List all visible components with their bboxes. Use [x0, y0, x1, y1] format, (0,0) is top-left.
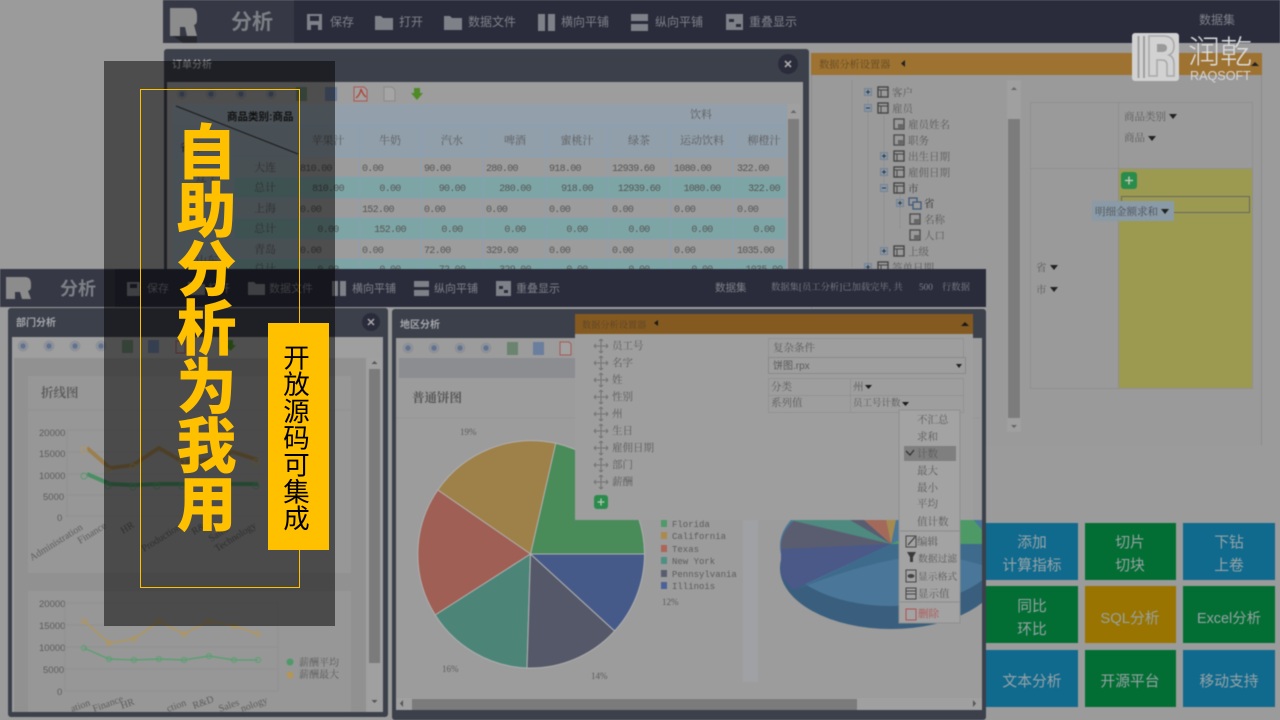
icon: add green plus — [1121, 172, 1137, 189]
y axis labels: 5000 — [43, 492, 64, 503]
window: region analysis — [392, 309, 1002, 720]
field tree: 雇员姓名 — [908, 118, 950, 131]
field tree: 省 — [924, 197, 935, 210]
order pivot table: 810.00 — [300, 164, 333, 175]
field list: 员工号 — [612, 340, 644, 352]
order pivot table: 总计 — [254, 180, 276, 194]
line chart card — [28, 376, 351, 573]
button: open source platform — [1085, 650, 1176, 707]
field list: 姓 — [612, 373, 623, 386]
y axis labels: 20000 — [39, 428, 65, 439]
order pivot table: 918.00 — [549, 164, 582, 175]
order pivot table: 牛奶 — [379, 133, 401, 147]
x axis labels: Sales — [207, 524, 231, 545]
yellow title frame — [140, 90, 300, 588]
window title: 订单分析 — [172, 58, 212, 71]
pie percentage labels: 14% — [591, 671, 608, 681]
x axis labels: Technology — [213, 520, 259, 555]
order pivot table: 0.00 — [362, 246, 384, 257]
line chart card: 折线图 — [41, 385, 79, 400]
field tree: 签单日期 — [892, 261, 934, 274]
order pivot table: 上海 — [254, 201, 276, 215]
field tree — [852, 80, 950, 274]
field list — [594, 339, 654, 489]
x axis labels: Sales — [217, 697, 241, 715]
y axis labels: 15000 — [39, 621, 65, 632]
button: year on year — [986, 586, 1078, 643]
watermark logo — [1132, 33, 1252, 83]
order pivot table: 绿茶 — [628, 133, 650, 147]
dark title overlay panel — [104, 61, 335, 626]
order pivot table: 0.00 — [691, 225, 713, 236]
button: Excel analysis — [1183, 586, 1275, 643]
order pivot table: 商品类别:商品 — [227, 110, 294, 123]
order pivot table: 918.00 — [561, 184, 594, 195]
field list: 部门 — [612, 458, 633, 471]
order pivot table: 1080.00 — [683, 184, 721, 195]
toolbar icons and labels: 数据文件 — [269, 281, 313, 295]
settings header — [811, 53, 1262, 75]
horizontal scrollbar — [396, 698, 982, 710]
aggregation dropdown menu: 编辑 — [917, 535, 938, 548]
vertical scrollbar — [368, 358, 382, 712]
pie legend: Illinois — [672, 582, 715, 592]
report toolbar icons — [176, 87, 423, 101]
order pivot table: 0.00 — [691, 265, 713, 276]
toolbar icons and labels — [127, 281, 970, 296]
toolbar icons and labels: 数据集[员工分析]已加载完毕, 共 — [771, 281, 903, 293]
panel: data analysis settings (region) — [575, 314, 973, 623]
button: mobile support — [1183, 650, 1275, 707]
watermark logo: RAQSOFT — [1190, 69, 1251, 83]
report toolbar icons — [18, 340, 236, 353]
main title: 自助分析为我用 — [168, 121, 235, 532]
order pivot table: 省 市 — [180, 141, 204, 154]
order pivot table: 啤酒 — [504, 134, 526, 147]
chart options form: 饼图.rpx — [773, 359, 810, 372]
order pivot table: 0.00 — [549, 205, 571, 216]
3D salary average line — [87, 474, 258, 485]
button: SQL analysis — [1085, 586, 1176, 643]
pie percentage labels — [442, 427, 679, 681]
order pivot table: 329.00 — [499, 265, 532, 276]
x axis labels: R&D — [190, 517, 214, 538]
order pivot table: 1035.00 — [737, 246, 775, 257]
field list: 雇佣日期 — [612, 441, 654, 454]
x axis labels: HR — [119, 697, 136, 712]
order pivot table: 0.00 — [362, 164, 384, 175]
chart options form: 分类 — [771, 380, 792, 393]
toolbar heading: 分析 — [60, 279, 96, 299]
pie percentage labels: 19% — [460, 427, 477, 437]
order pivot table: 12939.60 — [618, 184, 661, 195]
pie percentage labels: 16% — [442, 664, 459, 674]
measure chip — [1092, 201, 1174, 221]
feature button grid — [986, 523, 1275, 707]
field tree: 雇佣日期 — [908, 166, 950, 179]
button: year on year: 同比 — [1017, 598, 1047, 615]
legend: 薪酬最大 — [299, 668, 339, 681]
field tree: 出生日期 — [908, 150, 950, 163]
toolbar icons and labels: 纵向平铺 — [655, 14, 703, 29]
field tree: 名称 — [924, 214, 945, 226]
toolbar icons and labels: 横向平铺 — [352, 281, 396, 295]
aggregation dropdown menu: 求和 — [917, 430, 938, 443]
toolbar icons and labels: 横向平铺 — [561, 14, 609, 29]
order pivot table: 0.00 — [549, 246, 571, 257]
pie legend: Pennsylvania — [672, 570, 737, 580]
x axis labels: Finance — [91, 693, 125, 715]
order pivot table: 总计 — [254, 261, 276, 275]
field list: 性别 — [612, 390, 633, 403]
y axis labels: 10000 — [39, 643, 65, 654]
order pivot table: 12939.60 — [612, 164, 655, 175]
icon: raqsoft logo — [1132, 33, 1179, 81]
x axis labels — [69, 693, 269, 715]
aggregation dropdown menu: 最小 — [917, 481, 938, 494]
pivot layout grid: 省 — [1036, 261, 1047, 274]
order pivot table: 322.00 — [737, 164, 770, 175]
order pivot table: 辽宁 — [196, 171, 218, 184]
legend — [286, 656, 339, 681]
button: drill down and roll up — [1183, 523, 1275, 580]
order pivot table: 柳橙汁 — [748, 133, 780, 147]
button: drill down and roll up: 下钻 — [1214, 534, 1244, 551]
button: text analysis: 文本分析 — [1002, 673, 1062, 690]
order pivot table — [172, 104, 786, 276]
order pivot table: 运动饮料 — [680, 133, 724, 147]
line chart card 2 — [28, 591, 351, 715]
field tree: 人口 — [924, 229, 945, 242]
aggregation dropdown menu: 值计数 — [917, 515, 949, 528]
toolbar icons and labels: 数据文件 — [468, 14, 516, 29]
button: drill down and roll up: 上卷 — [1214, 557, 1244, 574]
order pivot table: 0.00 — [674, 205, 696, 216]
toolbar icons and labels: 500 — [919, 283, 933, 293]
y axis labels — [39, 599, 65, 698]
button: SQL analysis: SQL分析 — [1100, 610, 1160, 627]
aggregation dropdown menu: 不汇总 — [917, 413, 949, 426]
field tree: 客户 — [892, 86, 913, 99]
order pivot table: 0.00 — [566, 265, 588, 276]
icon: product logo R — [6, 277, 31, 299]
button: slice and dice: 切块 — [1115, 557, 1145, 574]
toolbar icons and labels: 打开 — [208, 281, 230, 295]
order pivot table: 0.00 — [317, 265, 339, 276]
field tree: 雇员 — [892, 102, 914, 115]
order pivot table: 0.00 — [566, 225, 588, 236]
order pivot table: 0.00 — [300, 205, 322, 216]
field tree: 市 — [908, 182, 919, 195]
settings header — [575, 314, 973, 334]
aggregation dropdown menu: 最大 — [917, 464, 938, 477]
second application toolbar — [0, 269, 986, 307]
tree scrollbar — [1007, 80, 1021, 432]
aggregation dropdown menu: 平均 — [917, 497, 938, 510]
toolbar icons and labels: 重叠显示 — [749, 15, 797, 29]
order pivot table: 0.00 — [424, 205, 446, 216]
order pivot table: 72.00 — [439, 265, 466, 276]
order pivot table: 0.00 — [379, 184, 401, 195]
measure chip: 明细金额求和 — [1095, 205, 1158, 218]
y axis labels — [39, 428, 65, 524]
window: order analysis — [164, 49, 809, 276]
y axis labels: 20000 — [39, 599, 65, 610]
pie legend: California — [672, 532, 727, 542]
field list: 州 — [612, 408, 622, 420]
close button — [778, 54, 798, 74]
report toolbar icons — [402, 342, 571, 355]
3D pie chart — [780, 520, 982, 630]
settings header: 数据分析设置器 — [819, 58, 890, 71]
icon: product logo R — [170, 8, 197, 43]
aggregation dropdown menu — [899, 410, 960, 623]
subtitle tag: 开放源码可集成 — [279, 344, 309, 531]
watermark logo: 润乾 — [1188, 34, 1252, 70]
top application toolbar — [163, 0, 1280, 43]
x axis labels — [28, 517, 259, 564]
toolbar icons and labels: 重叠显示 — [516, 281, 560, 295]
order pivot table: 329.00 — [486, 246, 519, 257]
order pivot table: 152.00 — [362, 205, 395, 216]
pie legend: Florida — [672, 520, 710, 530]
button: Excel analysis: Excel分析 — [1197, 610, 1261, 627]
order pivot table: 总计 — [254, 221, 276, 235]
salary max line — [84, 621, 258, 643]
order pivot table: 0.00 — [753, 225, 775, 236]
button: slice and dice: 切片 — [1115, 534, 1145, 551]
order pivot table: 280.00 — [486, 164, 519, 175]
order pivot table: 山东 — [196, 254, 218, 267]
y axis labels: 0 — [57, 687, 62, 698]
aggregation dropdown menu: 显示格式 — [918, 570, 957, 583]
order pivot table: 0.00 — [737, 205, 759, 216]
pie legend: New York — [672, 557, 715, 567]
pie chart — [418, 441, 644, 668]
button: add calculated metric: 计算指标 — [1002, 557, 1062, 574]
order pivot table: 90.00 — [439, 184, 466, 195]
pivot layout grid: 商品类别 — [1124, 110, 1166, 123]
aggregation dropdown menu: 计数 — [917, 447, 938, 460]
order pivot table: 0.00 — [504, 225, 526, 236]
order pivot table: 0.00 — [674, 246, 696, 257]
3D salary max line — [87, 448, 258, 468]
x axis labels: nology — [239, 695, 269, 715]
order pivot table: 810.00 — [312, 184, 345, 195]
y axis labels: 15000 — [39, 449, 65, 460]
chart options form: 复杂条件 — [773, 341, 815, 354]
y axis labels: 5000 — [43, 665, 64, 676]
x axis labels: R&D — [191, 694, 215, 712]
order pivot table: 0.00 — [612, 246, 634, 257]
pie legend — [661, 520, 737, 592]
order pivot table: 0.00 — [612, 205, 634, 216]
aggregation dropdown menu: 删除 — [918, 607, 939, 620]
button: text analysis — [986, 650, 1078, 707]
order pivot table: 72.00 — [424, 246, 451, 257]
x axis labels: ation — [69, 698, 92, 715]
x axis labels: ction — [165, 698, 188, 715]
chart title: 普通饼图 — [412, 390, 462, 405]
window title: 部门分析 — [16, 316, 56, 329]
chart options form — [768, 338, 966, 412]
order pivot table: 汽水 — [441, 133, 463, 147]
settings header: 数据分析设置器 — [582, 319, 646, 330]
aggregation dropdown menu: 数据过滤 — [918, 552, 957, 565]
icon: add green plus — [594, 495, 608, 509]
panel: data analysis settings (order) — [811, 53, 1262, 445]
y axis labels: 0 — [57, 513, 62, 524]
order pivot table: 0.00 — [486, 205, 508, 216]
order pivot table: 0.00 — [628, 225, 650, 236]
pivot layout grid — [1030, 102, 1252, 388]
pivot layout grid: 市 — [1036, 283, 1047, 296]
toolbar icons and labels: 数据集 — [715, 281, 747, 294]
button: year on year: 环比 — [1017, 621, 1047, 638]
field list: 薪酬 — [612, 475, 633, 488]
subtitle tag — [268, 323, 329, 550]
field list: 名字 — [612, 357, 633, 369]
chart options form: 系列值 — [771, 396, 803, 409]
y axis labels: 10000 — [39, 471, 65, 482]
window: department analysis — [8, 308, 388, 717]
x axis labels: Finance — [76, 520, 109, 547]
order pivot table: 1035.00 — [745, 265, 783, 276]
button: slice and dice — [1085, 523, 1176, 580]
field tree: 职务 — [908, 134, 929, 147]
toolbar heading: 分析 — [231, 11, 273, 34]
order pivot table: 饮料 — [690, 107, 712, 121]
order pivot table: 0.00 — [441, 225, 463, 236]
order pivot table: 0.00 — [300, 246, 322, 257]
x axis labels: Production — [140, 522, 183, 555]
button: open source platform: 开源平台 — [1100, 673, 1160, 690]
field list: 生日 — [612, 424, 633, 437]
order pivot table: 1080.00 — [674, 164, 712, 175]
chart options form: 员工号计数 — [853, 397, 901, 409]
order pivot table: 大连 — [254, 160, 276, 174]
toolbar icons and labels: 纵向平铺 — [434, 281, 478, 295]
pie legend: Texas — [672, 545, 699, 555]
toolbar icons and labels: 保存 — [147, 281, 169, 295]
button: add calculated metric: 添加 — [1017, 534, 1047, 551]
button: add calculated metric — [986, 523, 1078, 580]
order pivot table: 青岛 — [254, 242, 276, 256]
order pivot table: 蜜桃汁 — [560, 133, 594, 147]
aggregation dropdown menu: 显示值 — [918, 587, 950, 600]
x axis labels: Administration — [28, 522, 85, 564]
order pivot table: 苹果汁 — [312, 133, 344, 147]
order pivot table: 152.00 — [374, 225, 407, 236]
order pivot table: 0.00 — [379, 265, 401, 276]
order pivot table: 0.00 — [628, 265, 650, 276]
pie percentage labels: 12% — [662, 597, 679, 607]
toolbar icons and labels: 打开 — [399, 15, 423, 29]
order pivot table: 90.00 — [424, 164, 451, 175]
close button — [362, 313, 380, 331]
chart options form: 州 — [853, 381, 864, 393]
toolbar icons and labels: 保存 — [330, 15, 354, 29]
pivot layout grid: 商品 — [1124, 131, 1145, 144]
x axis labels: HR — [119, 520, 137, 537]
field tree: 上级 — [908, 245, 929, 258]
table scrollbar — [787, 104, 800, 274]
button: mobile support: 移动支持 — [1199, 673, 1259, 690]
legend: 薪酬平均 — [299, 656, 339, 669]
salary average line — [84, 648, 258, 660]
window title: 地区分析 — [400, 318, 440, 331]
toolbar icons and labels: 数据集 — [1199, 12, 1235, 27]
order pivot table: 322.00 — [748, 184, 781, 195]
order pivot table: 280.00 — [499, 184, 532, 195]
toolbar icons and labels — [307, 12, 1235, 31]
toolbar icons and labels: 行数据 — [942, 281, 970, 293]
order pivot table: 0.00 — [317, 225, 339, 236]
